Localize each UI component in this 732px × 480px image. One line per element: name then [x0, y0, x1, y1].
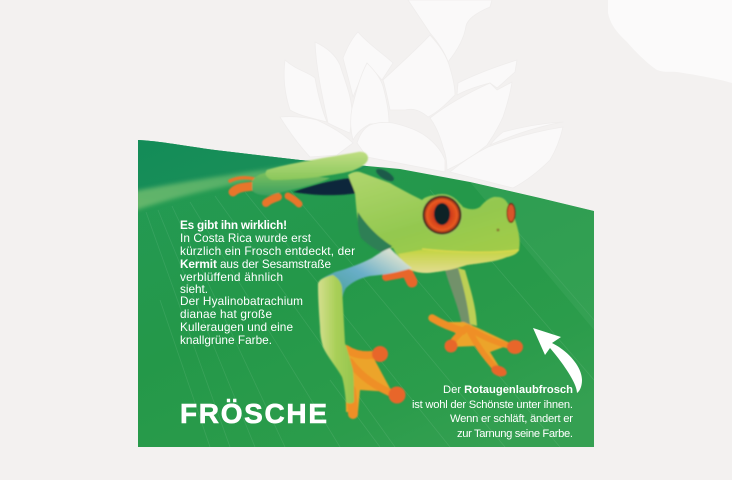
- lotus flower watermark: [280, 0, 563, 188]
- leaf highlight right side: [470, 182, 594, 330]
- frog mouth line: [422, 249, 519, 252]
- text block: Kermit frog: dianae hat große: [180, 307, 272, 321]
- text block: Rotaugenlaubfrosch: [412, 384, 573, 440]
- text block: Kermit frog: knallgrüne Farbe.: [180, 333, 272, 347]
- text block: Kermit frog: verblüffend ähnlich: [180, 270, 283, 284]
- decorative white blob top right: [608, 0, 732, 83]
- frog jaw and belly: [398, 250, 519, 273]
- text block: Rotaugenlaubfrosch: ist wohl der Schönste unter ihnen.: [412, 399, 573, 411]
- text block: Kermit frog: [180, 218, 355, 347]
- front foot: [345, 346, 406, 414]
- text block: Kermit frog: In Costa Rica wurde erst: [180, 231, 312, 245]
- arrow: [533, 328, 582, 393]
- leaf midrib: [138, 166, 280, 212]
- frog shadow under hind leg: [293, 178, 358, 195]
- front leg: [318, 275, 354, 404]
- text block: Kermit frog: sieht.: [180, 282, 208, 296]
- frog eye: [421, 194, 463, 236]
- back right foot: [432, 318, 523, 378]
- text block: Kermit frog: Kermit aus der Sesamstraße: [180, 257, 331, 271]
- hind thigh: [266, 152, 368, 180]
- text block: Rotaugenlaubfrosch: Wenn er schläft, ändert er: [450, 413, 573, 425]
- hind toes: [230, 178, 299, 204]
- frog far eye: [506, 203, 516, 223]
- frog nostril: [496, 228, 500, 232]
- text block: Rotaugenlaubfrosch: zur Tarnung seine Farbe.: [457, 428, 573, 440]
- text block: Kermit frog: Kulleraugen und eine: [180, 320, 293, 334]
- frog dark flank: [358, 212, 392, 254]
- leaf background panel: [130, 138, 594, 448]
- title: FRÖSCHE: [180, 398, 327, 429]
- text block: Kermit frog: kürzlich ein Frosch entdeckt, der: [180, 244, 355, 258]
- far leg spot on back: [374, 167, 396, 183]
- text block: Kermit frog: Es gibt ihn wirklich!: [180, 218, 287, 232]
- back right leg: [445, 268, 475, 325]
- upper dark leaf half: [138, 140, 368, 190]
- frog body and head: [348, 172, 520, 273]
- hind shin: [252, 172, 330, 195]
- hidden front foot: [386, 274, 412, 282]
- leaf veins: [146, 190, 594, 447]
- frog front arm: [320, 248, 412, 304]
- text block: Rotaugenlaubfrosch: Der Rotaugenlaubfrosch: [443, 384, 573, 396]
- text block: Kermit frog: Der Hyalinobatrachium: [180, 294, 303, 308]
- frog: [230, 152, 523, 414]
